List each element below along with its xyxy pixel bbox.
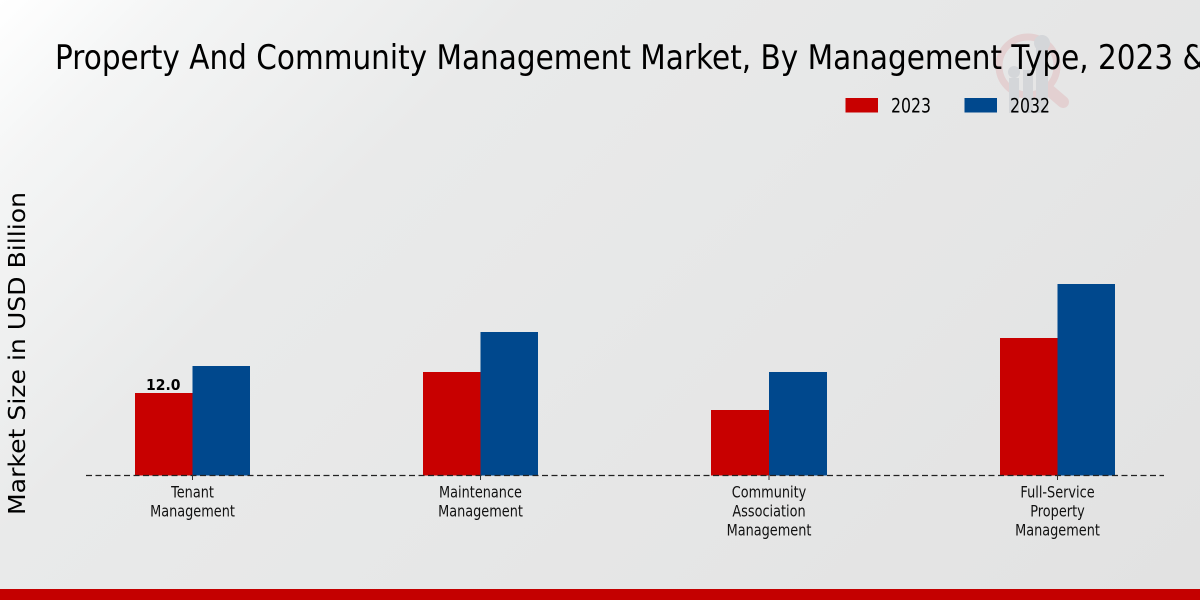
category label: Community Association Management (727, 484, 812, 540)
bar 2023: Full-Service Property Management (1000, 338, 1058, 476)
bar chart (86, 284, 1164, 480)
category label: Community Association Management: Management (727, 522, 812, 540)
value label: 12.0 (146, 376, 181, 394)
legend (846, 94, 1050, 118)
category label: Full-Service Property Management: Full-Service (1020, 484, 1095, 502)
bar 2023: Maintenance Management (423, 372, 480, 476)
category label: Full-Service Property Management (1015, 484, 1100, 540)
category label: Community Association Management: Community (732, 484, 807, 502)
x axis baseline (86, 474, 1164, 476)
group: Maintenance Management (423, 332, 538, 476)
category label: Tenant Management (150, 484, 235, 521)
category label: Maintenance Management (438, 484, 523, 521)
category label: Maintenance Management: Management (438, 503, 523, 521)
bar 2023: Community Association Management (711, 410, 769, 476)
y axis label: Market Size in USD Billion (5, 192, 31, 515)
category label: Tenant Management: Tenant (170, 484, 214, 502)
group: Community Association Management (711, 372, 827, 476)
category label: Full-Service Property Management: Management (1015, 522, 1100, 540)
bar 2032: Community Association Management (769, 372, 827, 476)
category label: Maintenance Management: Maintenance (439, 484, 522, 502)
category label: Community Association Management: Association (732, 503, 806, 521)
group: Full-Service Property Management (1000, 284, 1115, 476)
bottom red band (0, 589, 1200, 600)
legend label 2023: 2023 (891, 94, 931, 118)
watermark logo icon (999, 35, 1063, 113)
legend swatch 2023 (846, 98, 878, 112)
category label: Tenant Management: Management (150, 503, 235, 521)
bar 2032: Full-Service Property Management (1058, 284, 1115, 476)
bar 2023: Tenant Management (135, 393, 192, 476)
legend swatch 2032 (964, 98, 997, 112)
group: Tenant Management (135, 366, 250, 476)
category label: Full-Service Property Management: Property (1030, 503, 1085, 521)
legend label 2032: 2032 (1010, 94, 1050, 118)
bar 2032: Tenant Management (192, 366, 250, 476)
bar 2032: Maintenance Management (480, 332, 538, 476)
